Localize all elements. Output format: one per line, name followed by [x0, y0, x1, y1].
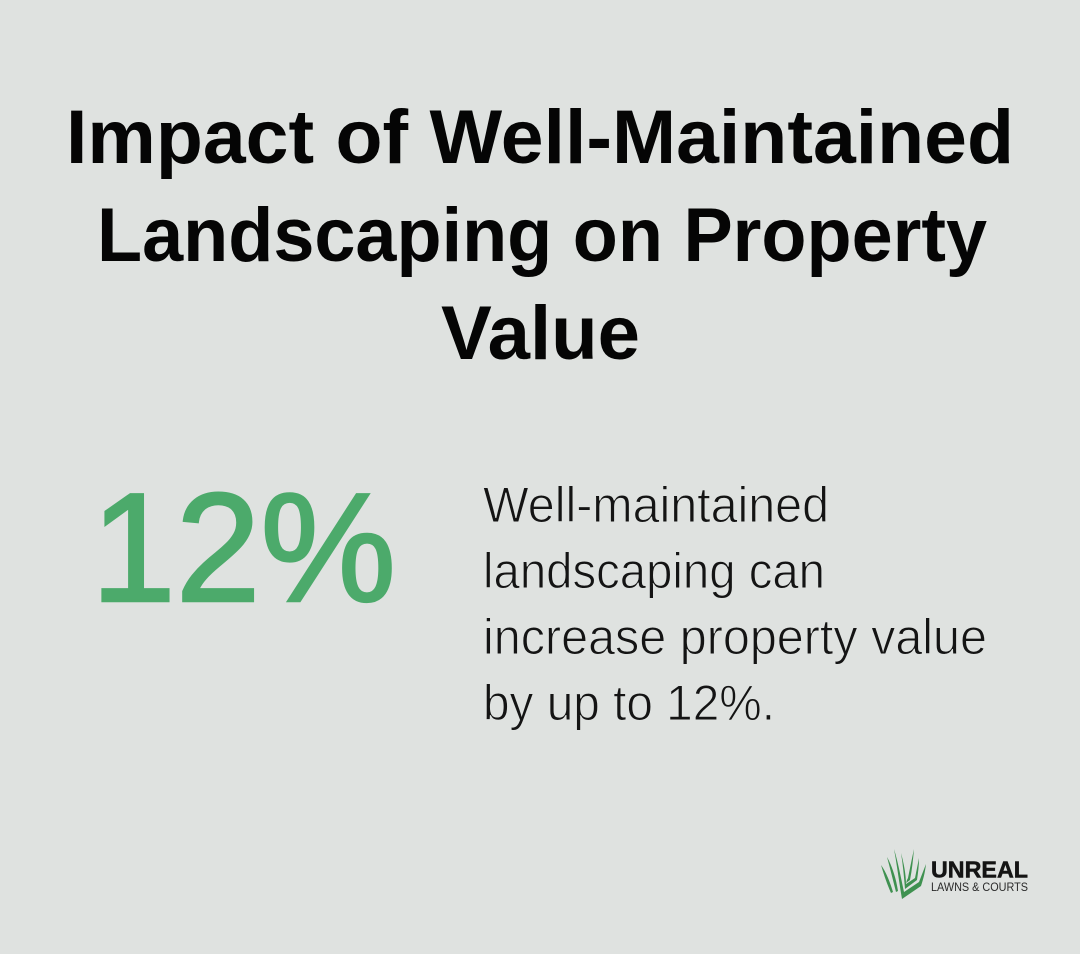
logo tagline: LAWNS & COURTS — [931, 882, 1028, 894]
description text: landscaping can — [483, 543, 825, 599]
logo: Unreal Lawns & Courts — [881, 849, 1028, 899]
description text: Well-maintained — [483, 477, 829, 533]
logo wordmark: UNREAL — [931, 856, 1028, 882]
big statistic: 12%: 12% — [91, 461, 396, 634]
description text: by up to 12%. — [483, 675, 775, 731]
description text: increase property value — [483, 609, 987, 665]
description text — [483, 477, 987, 731]
title: Value — [441, 291, 640, 376]
title: Landscaping on Property — [97, 193, 987, 278]
icon: grass blades — [881, 849, 926, 899]
title — [66, 95, 1014, 376]
title: Impact of Well-Maintained — [66, 95, 1014, 180]
